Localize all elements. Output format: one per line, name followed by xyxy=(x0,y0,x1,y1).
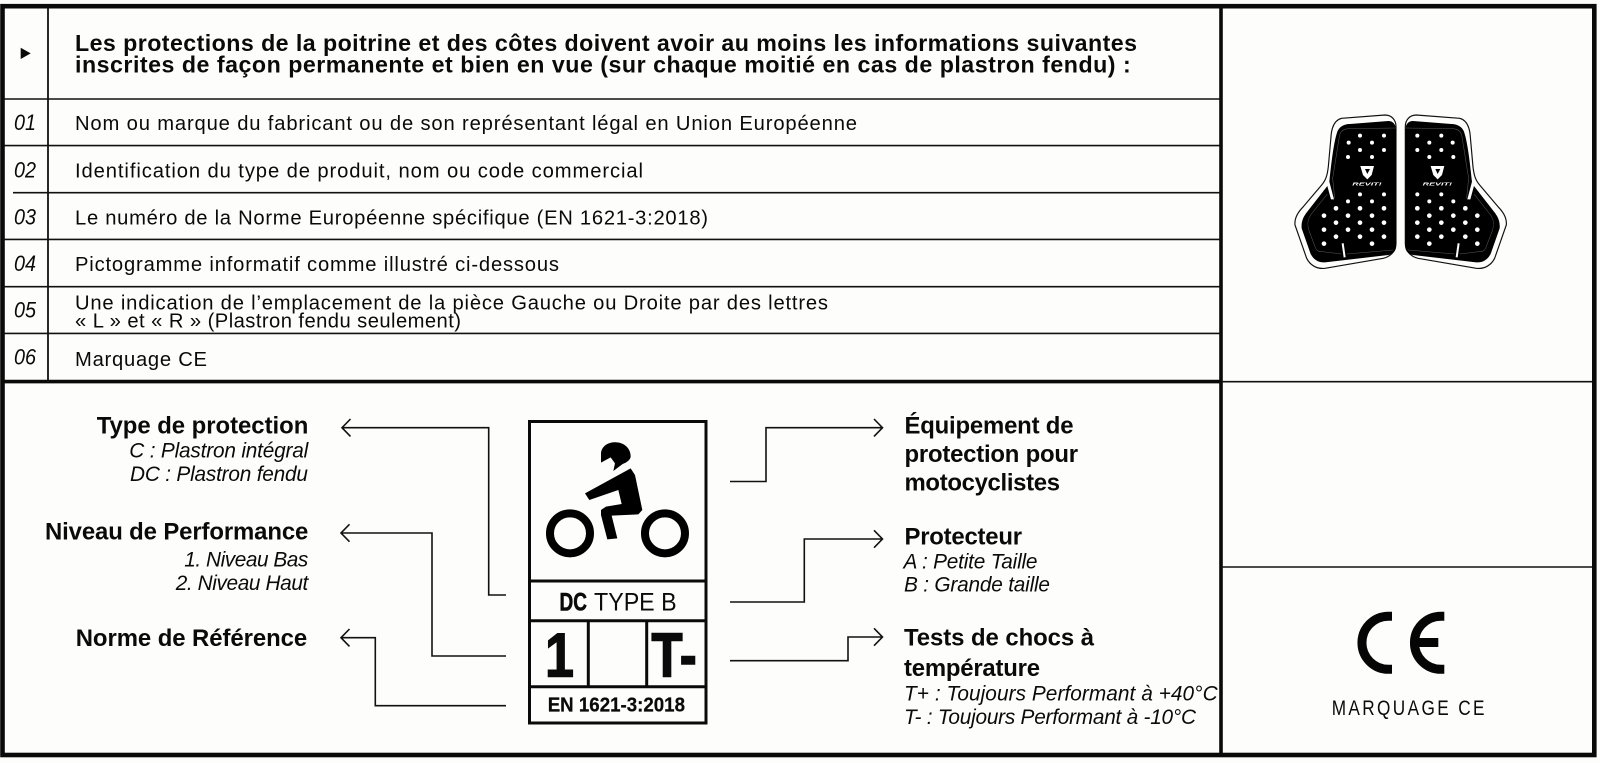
icon: CE mark xyxy=(1362,616,1444,669)
arrow: equipement xyxy=(730,419,882,482)
left label: niveau de performance: 2. Niveau Haut xyxy=(175,572,310,595)
heading xyxy=(75,30,1137,78)
type line: DC xyxy=(560,588,587,616)
right label: tests de chocs xyxy=(904,625,1219,729)
temperature mark: T- xyxy=(652,622,697,691)
type line xyxy=(560,588,677,617)
left label: norme de reference: Norme de Référence xyxy=(76,625,307,652)
arrow: niveau de performance xyxy=(341,524,506,656)
left label: niveau de performance xyxy=(45,518,310,595)
pictogram label xyxy=(529,422,706,723)
left label: niveau de performance: Niveau de Performance xyxy=(45,518,308,545)
caption: marquage CE: MARQUAGE CE xyxy=(1332,696,1485,721)
heading: Les protections de la poitrine et des côtes doivent avoir au moins les informations suivantes xyxy=(75,30,1137,56)
right label: protecteur: A : Petite Taille xyxy=(902,550,1038,573)
standard reference: EN 1621-3:2018 xyxy=(548,694,685,717)
illustration: split chest protector xyxy=(1295,115,1506,268)
row numbers: 05 xyxy=(14,298,37,323)
right label: protecteur xyxy=(902,523,1050,597)
list of required markings xyxy=(75,113,857,371)
arrow: norme de reference xyxy=(341,629,506,706)
arrow: type de protection xyxy=(342,419,506,595)
right label: tests de chocs: Tests de chocs à xyxy=(904,625,1095,652)
right label: protecteur: Protecteur xyxy=(904,523,1022,550)
row numbers: 02 xyxy=(14,158,36,182)
arrow: protecteur xyxy=(730,530,882,602)
right label: equipement de protection: motocyclistes xyxy=(904,470,1060,496)
row numbers: 03 xyxy=(14,204,37,229)
row numbers: 06 xyxy=(14,345,37,370)
left label: type de protection: DC : Plastron fendu xyxy=(130,463,308,486)
list of required markings: Une indication de l’emplacement de la pièce Gauche ou Droite par des lettres xyxy=(75,292,828,314)
illustration: split chest protector: REVIT! xyxy=(1423,181,1453,187)
illustration: split chest protector: REVIT! xyxy=(1352,181,1382,187)
arrow: tests de chocs xyxy=(730,628,882,661)
list of required markings: Pictogramme informatif comme illustré ci-dessous xyxy=(75,254,559,276)
icon: motorcyclist xyxy=(550,442,685,553)
left label: niveau de performance: 1. Niveau Bas xyxy=(184,549,308,572)
left label: type de protection xyxy=(97,412,310,486)
performance level: 1 xyxy=(545,621,574,691)
heading: inscrites de façon permanente et bien en vue (sur chaque moitié en cas de plastron fendu) : xyxy=(75,52,1131,78)
list of required markings: Nom ou marque du fabricant ou de son représentant légal en Union Européenne xyxy=(75,113,857,135)
icon: header triangle xyxy=(21,48,31,59)
left label: type de protection: C : Plastron intégral xyxy=(129,439,310,462)
right label: equipement de protection: protection pour xyxy=(904,441,1078,468)
right label: protecteur: B : Grande taille xyxy=(904,574,1050,597)
row numbers xyxy=(14,110,37,370)
row numbers: 01 xyxy=(14,110,36,135)
right label: tests de chocs: T- : Toujours Performant à -10°C xyxy=(904,706,1197,729)
type line: TYPE B xyxy=(594,589,677,617)
row numbers: 04 xyxy=(14,251,36,276)
list of required markings: Le numéro de la Norme Européenne spécifique (EN 1621-3:2018) xyxy=(75,207,708,229)
left label: type de protection: Type de protection xyxy=(97,412,308,439)
right label: equipement de protection: Équipement de xyxy=(904,411,1074,439)
right label: equipement de protection xyxy=(904,411,1078,496)
list of required markings: Identification du type de produit, nom ou code commercial xyxy=(75,161,643,183)
list of required markings: « L » et « R » (Plastron fendu seulement) xyxy=(75,310,461,332)
right label: tests de chocs: T+ : Toujours Performant à +40°C xyxy=(904,683,1219,706)
right label: tests de chocs: température xyxy=(904,655,1040,682)
list of required markings: Marquage CE xyxy=(75,349,207,371)
